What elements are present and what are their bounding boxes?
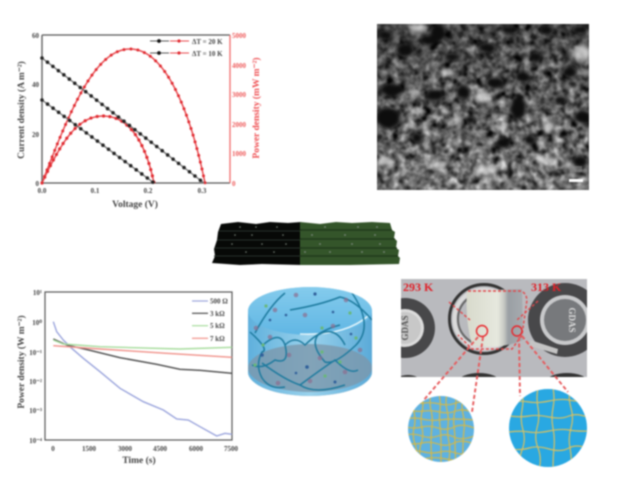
plot frame	[42, 35, 230, 183]
top rim highlight	[300, 316, 368, 334]
power curve dT 10 K	[42, 116, 154, 183]
y axis ticks: 10¹	[33, 289, 42, 297]
x axis ticks: 0	[51, 445, 55, 453]
left badge label: GDAS	[400, 315, 410, 341]
3 kilo-ohm curve	[53, 339, 232, 373]
polymer network	[250, 290, 372, 390]
left axis title: Current density (A m⁻²)	[16, 61, 27, 159]
woven thermocell textile	[212, 222, 400, 265]
right axis ticks: 1000	[232, 150, 246, 158]
scale bar	[569, 166, 583, 182]
dark pores	[375, 24, 592, 168]
black weave shading	[214, 231, 300, 256]
line chart: power density vs time	[16, 289, 238, 466]
power curve dT 20 K	[42, 49, 205, 183]
y axis ticks: 10⁻²	[29, 378, 42, 386]
y axis ticks: 10⁻¹	[29, 349, 42, 357]
right axis title: Power density (mW m⁻²)	[251, 57, 262, 159]
x axis ticks	[51, 445, 238, 453]
black half	[212, 222, 301, 265]
y axis ticks	[29, 289, 43, 445]
right axis ticks: 4000	[232, 62, 246, 70]
right axis ticks: 3000	[232, 91, 246, 99]
right badge: GDAS	[567, 307, 577, 333]
x axis title: Voltage (V)	[112, 199, 158, 210]
legend: 7 kΩ	[210, 335, 225, 343]
photo of thermo-responsive film on badges	[400, 278, 588, 468]
right axis ticks	[232, 32, 246, 188]
legend: 500 Ω	[210, 298, 228, 306]
temperature label 293 K: 293 K	[403, 280, 434, 294]
temperature label 313 K: 313 K	[531, 280, 562, 294]
left axis ticks: 60	[32, 32, 40, 40]
x axis ticks: 4500	[153, 445, 168, 453]
dark ions	[260, 292, 352, 384]
centre badge	[450, 284, 518, 354]
current curve dT 20 K	[42, 58, 204, 183]
left axis ticks: 40	[32, 81, 40, 89]
x axis title: Time (s)	[122, 455, 156, 466]
SEM micrograph	[375, 24, 592, 190]
top surface	[248, 287, 372, 335]
left axis ticks: 0	[36, 180, 40, 188]
magnified network, contracted state	[406, 394, 474, 468]
green weave shading	[300, 230, 398, 256]
x axis ticks: 1500	[82, 445, 96, 453]
zoom-in circles on film	[476, 326, 522, 336]
x axis ticks: 6000	[189, 445, 204, 453]
y axis ticks: 10⁰	[32, 319, 42, 327]
bottom badge edges	[400, 372, 584, 378]
x axis ticks: 0.1	[91, 187, 100, 195]
left axis ticks	[32, 32, 40, 188]
legend	[150, 38, 223, 58]
dashed selection and arrows	[449, 291, 538, 349]
crosslink nodes	[253, 304, 358, 378]
green half	[300, 222, 400, 265]
x axis ticks: 0.3	[198, 187, 207, 195]
dashed connector lines	[423, 336, 568, 412]
hydrogel cylinder	[248, 287, 372, 400]
weave highlights	[231, 226, 385, 253]
right badge	[527, 282, 588, 358]
legend: 3 kΩ	[210, 310, 225, 318]
y axis ticks: 10⁻⁴	[29, 437, 43, 445]
500 ohm curve	[53, 322, 232, 436]
right axis ticks: 2000	[232, 121, 246, 129]
y axis title: Power density (W m⁻²)	[16, 315, 27, 409]
legend: 5 kΩ	[210, 322, 225, 330]
x axis ticks	[38, 187, 207, 195]
x axis ticks: 0.2	[144, 187, 153, 195]
magnified network, swollen state	[509, 388, 589, 470]
legend: ΔT = 20 K	[192, 38, 223, 46]
legend: ΔT = 10 K	[192, 50, 223, 58]
bottom shadow	[248, 344, 372, 392]
right axis ticks: 0	[232, 180, 236, 188]
plot frame	[45, 292, 232, 440]
left axis ticks: 20	[32, 131, 40, 139]
bright clusters	[379, 24, 591, 175]
7 kilo-ohm curve	[53, 346, 232, 357]
x axis ticks: 0.0	[38, 187, 47, 195]
film sample	[467, 289, 523, 347]
line chart: current and power density vs voltage	[16, 32, 262, 210]
x axis ticks: 3000	[118, 445, 132, 453]
current curve dT 10 K	[42, 100, 154, 183]
x axis ticks: 7500	[224, 445, 238, 453]
dissolved ions	[254, 293, 362, 385]
y axis ticks: 10⁻³	[29, 407, 42, 415]
left badge	[400, 297, 436, 359]
5 kilo-ohm curve	[53, 340, 232, 349]
right axis ticks: 5000	[232, 32, 246, 40]
cylinder body	[248, 287, 372, 396]
legend	[192, 298, 228, 343]
